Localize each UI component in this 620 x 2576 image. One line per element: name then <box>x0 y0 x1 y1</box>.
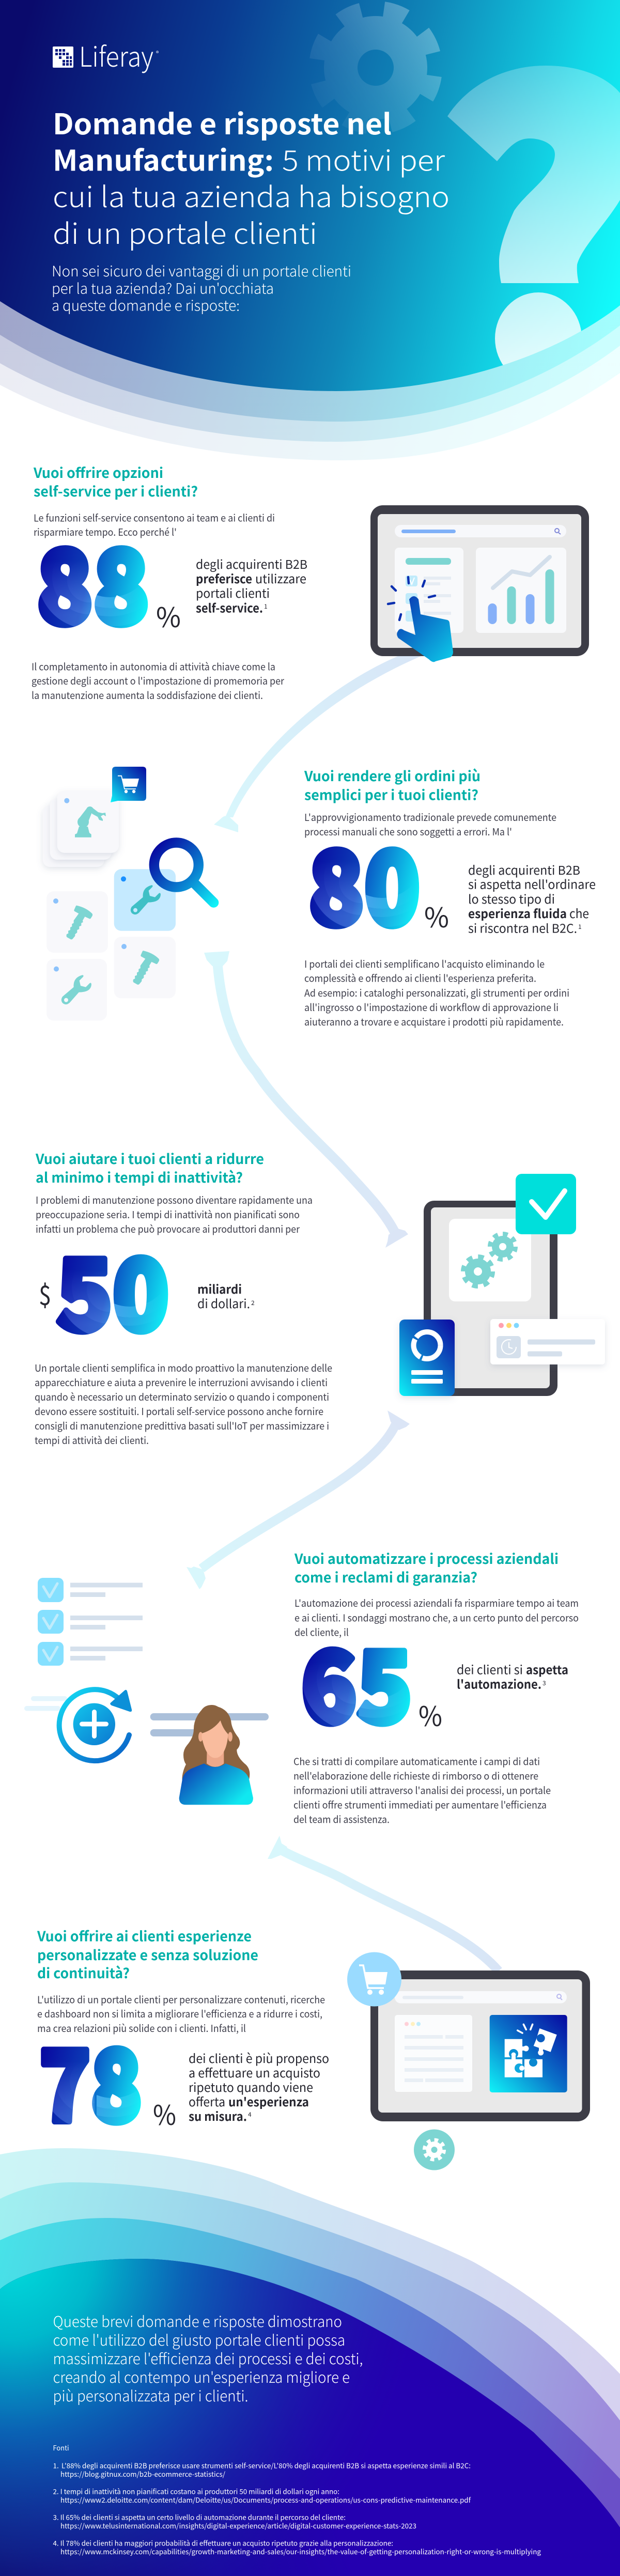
sources: 4. Il 78% dei clienti ha maggiori probabilità di effettuare un acquisto ripetuto grazie alla personalizzazione: <box>53 2538 393 2548</box>
stat: 88%: % <box>156 596 181 635</box>
stat: 88%: 88 <box>37 505 149 653</box>
intro text: L'automazione dei processi aziendali fa risparmiare tempo ai team <box>295 1596 579 1610</box>
intro text: preoccupazione seria. I tempi di inattività non pianificati sono <box>36 1207 300 1221</box>
stat: 65%: % <box>419 1695 442 1734</box>
stat description: l'automazione. <box>457 1675 541 1693</box>
icon: gears <box>463 1234 515 1286</box>
stat description: self-service. <box>196 598 263 616</box>
title: Manufacturing: <box>53 137 274 179</box>
arrow: section 2 to 3 <box>204 951 408 1248</box>
body text <box>35 1361 332 1447</box>
stat: $50: 50 <box>56 1216 169 1359</box>
stat description: utilizzare <box>255 569 306 587</box>
title: Domande e risposte nel <box>53 101 392 143</box>
illustration: tablet maintenance <box>399 1174 605 1396</box>
body text: all'ingrosso o l'impostazione di workflow di approvazione li <box>304 1000 559 1014</box>
icon: cart circle <box>347 1952 401 2007</box>
heading <box>35 1148 264 1187</box>
sources: Fonti <box>53 2442 69 2453</box>
sources: https://blog.gitnux.com/b2b-ecommerce-statistics/ <box>60 2469 226 2479</box>
closing text <box>32 659 285 702</box>
stat description: 3 <box>542 1679 546 1687</box>
stat description: 2 <box>251 1298 255 1307</box>
header background panel <box>0 0 620 391</box>
body text <box>293 1755 551 1826</box>
heading <box>33 462 198 501</box>
logo: Liferay: ® <box>156 49 159 57</box>
stat description: si riscontra nel B2C. <box>468 919 577 936</box>
body text: informazioni utili attraverso l'analisi dei processi, un portale <box>293 1783 551 1797</box>
panel: section 3 inattivita <box>35 1148 605 1447</box>
stat description: 1 <box>264 602 268 611</box>
icon: cart bubble <box>111 767 146 802</box>
stat description: degli acquirenti B2B <box>468 861 580 878</box>
intro text: Le funzioni self-service consentono ai team e ai clienti di <box>34 510 275 525</box>
stat description <box>457 1661 568 1693</box>
body text: complessità e offrendo ai clienti l'esperienza preferita. <box>304 971 536 985</box>
card: hammer <box>47 891 108 953</box>
body text <box>304 957 569 1029</box>
heading: Vuoi offrire opzioni <box>33 462 163 482</box>
stat description <box>196 555 307 616</box>
icon: pointing hand <box>388 577 453 662</box>
subtitle <box>52 260 351 315</box>
arrow: section 3 to 4 <box>187 1410 410 1589</box>
closing text: gestione degli account o l'impostazione di promemoria per <box>32 674 285 688</box>
heading: di continuità? <box>37 1962 130 1982</box>
sources <box>53 2442 541 2556</box>
intro text: risparmiare tempo. Ecco perché l' <box>34 525 177 539</box>
stat description: portali clienti <box>196 584 270 601</box>
heading: Vuoi aiutare i tuoi clienti a ridurre <box>35 1148 264 1168</box>
stat description: che <box>569 904 589 922</box>
body text: apparecchiature e aiuta a prevenire le interruzioni avvisando i clienti <box>35 1375 328 1389</box>
body text: Che si tratti di compilare automaticamente i campi di dati <box>293 1755 540 1768</box>
icon: robot arm <box>75 806 106 837</box>
card: hammer <box>114 937 176 998</box>
heading <box>294 1548 559 1587</box>
stat description <box>189 2049 329 2124</box>
closing statement: come l'utilizzo del giusto portale clienti possa <box>53 2329 345 2350</box>
stat description: ripetuto quando viene <box>189 2078 313 2096</box>
stat description <box>197 1280 255 1312</box>
illustration: woman <box>150 1705 269 1805</box>
intro text: L'utilizzo di un portale clienti per personalizzare contenuti, ricerche <box>37 1992 325 2007</box>
sources: 1. <box>53 2460 59 2471</box>
heading: come i reclami di garanzia? <box>295 1566 477 1587</box>
bottom wave layers <box>0 2148 620 2576</box>
intro text: del cliente, il <box>295 1625 349 1639</box>
stat description: miliardi <box>197 1280 242 1297</box>
body text: quando è necessario un determinato servizio o quando i componenti <box>35 1390 329 1404</box>
body text: I portali dei clienti semplificano l'acquisto eliminando le <box>304 957 545 971</box>
stat description: preferisce <box>196 569 252 587</box>
panel: section 5 esperienze <box>37 1925 590 2170</box>
card: donut <box>399 1320 455 1396</box>
heading: al minimo i tempi di inattività? <box>36 1167 243 1187</box>
closing statement <box>53 2310 363 2406</box>
body text: Ad esempio: i cataloghi personalizzati, gli strumenti per ordini <box>304 986 569 1000</box>
sources: https://www2.deloitte.com/content/dam/Deloitte/us/Documents/process-and-operations/us-cons-predictive-maintenance.pdf <box>60 2494 471 2505</box>
illustration: tablet dashboard <box>370 505 589 662</box>
body text: del team di assistenza. <box>293 1812 390 1826</box>
sources: 2. I tempi di inattività non pianificati costano ai produttori 50 miliardi di dollari ogni anno: <box>53 2486 339 2496</box>
stat: 80%: 80 <box>308 806 420 954</box>
body text: consigli di manutenzione predittiva basati sull'IoT per massimizzare i <box>35 1419 329 1433</box>
closing statement: più personalizzata per i clienti. <box>53 2384 248 2406</box>
closing statement: creando al contempo un'esperienza migliore e <box>53 2366 350 2387</box>
heading: self-service per i clienti? <box>34 480 198 501</box>
stat description: a effettuare un acquisto <box>189 2063 320 2081</box>
intro text <box>304 810 556 839</box>
icon: background gear <box>310 2 442 133</box>
card: wrench highlighted <box>114 869 176 931</box>
stat description: su misura. <box>189 2107 247 2124</box>
closing statement: massimizzare l'efficienza dei processi e dei costi, <box>53 2347 363 2369</box>
icon: gear circle <box>414 2130 455 2170</box>
body text: clienti offre strumenti immediati per aumentare l'efficienza <box>293 1798 547 1811</box>
subtitle: per la tua azienda? Dai un'occhiata <box>52 278 274 299</box>
intro text <box>295 1596 579 1639</box>
stat description: degli acquirenti B2B <box>196 555 307 572</box>
body text: tempi di attività dei clienti. <box>35 1433 149 1447</box>
stat description: lo stesso tipo di <box>468 890 555 907</box>
heading <box>304 765 481 804</box>
title: 5 motivi per <box>282 137 445 179</box>
icon: refresh plus <box>24 1689 132 1761</box>
card: history <box>490 1319 605 1364</box>
stat description: si aspetta nell'ordinare <box>468 875 596 893</box>
icon: magnifier <box>154 843 214 903</box>
stat description: di dollari. <box>197 1294 250 1312</box>
card: wrench <box>47 959 107 1021</box>
stat description <box>468 861 596 936</box>
stat: $50 <box>39 1197 197 1359</box>
stat: 65%: 65 <box>301 1608 412 1751</box>
stat description: dei clienti si <box>457 1661 523 1678</box>
title: di un portale clienti <box>53 211 317 252</box>
intro text: infatti un problema che può provocare ai produttori danni per <box>36 1222 300 1236</box>
panel: section 1 self-service <box>32 462 589 702</box>
stat: 78%: % <box>153 2094 176 2133</box>
illustration: parts catalog <box>43 767 213 1021</box>
stat description: dei clienti è più propenso <box>189 2049 329 2067</box>
body text: nell'elaborazione delle richieste di rimborso o di ottenere <box>293 1769 538 1782</box>
icon: background question mark <box>447 66 620 384</box>
intro text: L'approvvigionamento tradizionale prevede comunemente <box>304 810 556 824</box>
stat description: esperienza fluida <box>468 904 567 922</box>
sources: https://www.telusinternational.com/insights/digital-experience/article/digital-customer-experience-stats-2023 <box>60 2520 416 2531</box>
footer background panel <box>0 2259 620 2576</box>
intro text <box>37 1992 325 2035</box>
body text: devono essere sostituiti. I portali self-service possono anche fornire <box>35 1404 323 1418</box>
stat description: aspetta <box>526 1661 568 1678</box>
body text: aiuteranno a trovare e acquistare i prodotti più rapidamente. <box>304 1015 564 1029</box>
closing text: Il completamento in autonomia di attività chiave come la <box>32 659 275 674</box>
header band layers <box>0 207 620 460</box>
panel: section 2 ordini <box>43 765 596 1029</box>
stat: 80%: % <box>424 896 449 936</box>
body text: Un portale clienti semplifica in modo proattivo la manutenzione delle <box>35 1361 332 1375</box>
icon: check card <box>516 1174 576 1234</box>
intro text: e ai clienti. I sondaggi mostrano che, a un certo punto del percorso <box>295 1611 579 1624</box>
subtitle: a queste domande e risposte: <box>52 294 240 315</box>
heading <box>37 1925 258 1982</box>
sources: 3. Il 65% dei clienti si aspetta un certo livello di automazione durante il percorso del cliente: <box>53 2512 346 2522</box>
heading: Vuoi automatizzare i processi aziendali <box>294 1548 559 1568</box>
arrow: section 1 to 2 <box>214 656 421 832</box>
heading: Vuoi rendere gli ordini più <box>304 765 481 785</box>
stat description: 1 <box>578 922 582 931</box>
illustration: checklist <box>38 1578 143 1666</box>
stat description: offerta <box>189 2092 225 2110</box>
closing statement: Queste brevi domande e risposte dimostrano <box>53 2310 342 2332</box>
subtitle: Non sei sicuro dei vantaggi di un portale clienti <box>52 260 351 281</box>
intro text: processi manuali che sono soggetti a errori. Ma l' <box>304 825 512 839</box>
heading: Vuoi offrire ai clienti esperienze <box>37 1925 252 1946</box>
stat: $50: $ <box>39 1274 51 1313</box>
intro text <box>36 1193 313 1236</box>
arrow: section 4 to 5 <box>268 1836 499 1971</box>
intro text: ma crea relazioni più solide con i clienti. Infatti, il <box>37 2021 246 2035</box>
closing text: la manutenzione aumenta la soddisfazione dei clienti. <box>32 688 263 702</box>
stat description: un'esperienza <box>228 2092 309 2110</box>
card: puzzle <box>490 2015 567 2092</box>
title: cui la tua azienda ha bisogno <box>53 174 450 215</box>
heading: semplici per i tuoi clienti? <box>304 784 478 804</box>
intro text <box>34 510 275 539</box>
title <box>53 101 450 252</box>
stat: 78%: 78 <box>39 2007 142 2150</box>
stat description: 4 <box>248 2110 252 2119</box>
heading: personalizzate e senza soluzione <box>37 1944 258 1964</box>
intro text: e dashboard non si limita a migliorare l'efficienza e a ridurre i costi, <box>37 2007 322 2021</box>
intro text: I problemi di manutenzione possono diventare rapidamente una <box>36 1193 313 1207</box>
logo: Liferay: Liferay <box>79 36 153 75</box>
illustration: tablet personalization <box>347 1952 590 2170</box>
sources: https://www.mckinsey.com/capabilities/growth-marketing-and-sales/our-insights/the-value-of-getting-personalization-right-or-wrong-is-multiplying <box>60 2546 541 2556</box>
panel: section 4 automazione <box>24 1548 579 1826</box>
sources: L'88% degli acquirenti B2B preferisce usare strumenti self-service/L'80% degli acquirenti B2B si aspetta esperienze simili al B2C: <box>61 2460 471 2471</box>
